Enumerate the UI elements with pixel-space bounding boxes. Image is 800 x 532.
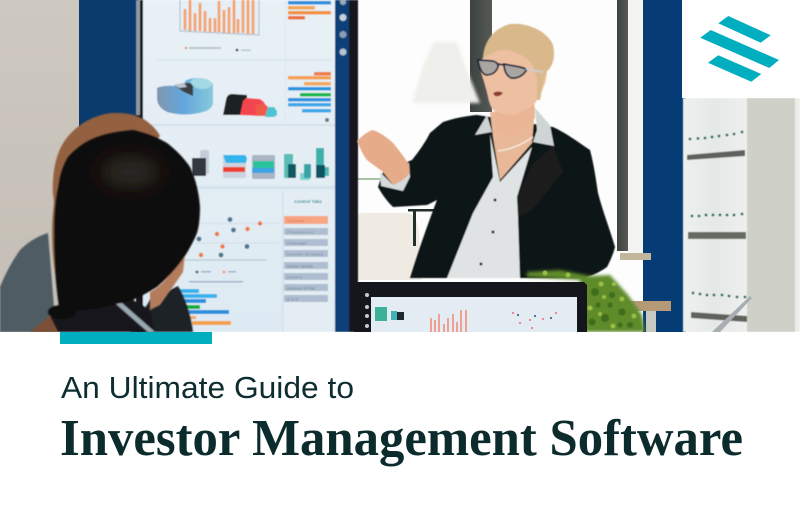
woman's collar	[116, 303, 155, 332]
hand	[357, 130, 410, 185]
bottom bar chart	[175, 289, 231, 325]
lapel shading	[517, 146, 563, 217]
pendant lamp	[412, 42, 480, 103]
laptop sidebar icons	[365, 293, 369, 328]
woman's clothing	[30, 298, 155, 332]
foreground woman with dark hair	[30, 130, 200, 332]
display reflective strip	[136, 0, 140, 115]
display blue bezel with icons	[335, 0, 349, 332]
cuff	[380, 162, 410, 191]
scatter plot	[185, 217, 279, 282]
laptop	[354, 282, 587, 332]
control tabs heading: Control Tabs	[294, 199, 322, 204]
logo tile	[682, 0, 800, 98]
main title: Investor Management Software	[60, 410, 743, 467]
woman's hair	[54, 130, 200, 313]
background wall	[0, 0, 80, 332]
buttons	[480, 198, 496, 266]
glasses	[478, 60, 543, 78]
bookshelf	[683, 98, 800, 332]
control tabs panel: Placement	[287, 230, 314, 234]
wall display	[136, 0, 358, 332]
display screen	[143, 0, 335, 332]
side table	[630, 301, 671, 332]
control tabs panel: Income streams	[287, 252, 323, 256]
collar left	[475, 115, 492, 135]
subtitle: An Ultimate Guide to	[61, 370, 354, 405]
display frame	[136, 0, 358, 332]
laptop column chart	[431, 310, 466, 332]
mouth	[493, 92, 503, 96]
column chart	[180, 0, 259, 51]
plant	[527, 270, 645, 332]
control tabs panel: Market Identity	[287, 264, 313, 268]
logo mark	[700, 16, 779, 82]
control tabs panel: General	[287, 218, 304, 223]
bright window	[358, 0, 643, 280]
photo: presenter at a dashboard screen	[0, 0, 800, 332]
middle right bars	[288, 72, 331, 122]
3D shapes row	[192, 148, 329, 180]
blouse	[447, 134, 532, 278]
collar right	[533, 108, 554, 146]
neck	[528, 104, 536, 119]
woman's hair tie	[48, 305, 76, 319]
hair	[483, 24, 554, 100]
woman's face edge	[150, 245, 186, 310]
blue wall right	[643, 0, 686, 332]
laptop 3D icons	[375, 307, 404, 321]
face	[479, 42, 547, 115]
jacket	[378, 115, 615, 278]
laptop scatter	[512, 312, 557, 329]
control tabs panel	[284, 199, 328, 302]
3D pie chart	[157, 78, 213, 114]
man's head	[53, 113, 160, 230]
foreground man	[0, 113, 193, 332]
top right bars	[288, 1, 331, 20]
accent bar	[60, 332, 212, 344]
blue wall left	[79, 0, 139, 128]
presenter	[357, 24, 615, 278]
hair sheen	[100, 156, 160, 188]
window sill	[620, 253, 651, 260]
hair edge highlight	[52, 170, 72, 310]
pearl necklace	[498, 137, 533, 151]
man's dark jacket	[130, 286, 193, 332]
control tabs panel: Assets	[287, 276, 302, 280]
control tabs panel: R & S	[287, 298, 298, 302]
woman's brown hair tail	[30, 316, 58, 332]
3D stacked cone	[223, 94, 277, 117]
pen on the right	[712, 296, 752, 332]
control tabs panel: Business & Risk	[287, 286, 315, 290]
control tabs panel: Coverage	[287, 242, 306, 246]
man's shoulder	[0, 233, 56, 332]
skin V neckline	[490, 108, 535, 180]
